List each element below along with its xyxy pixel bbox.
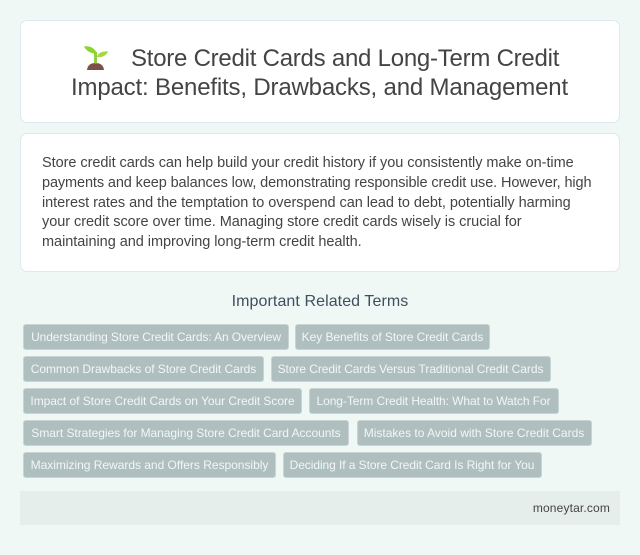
- summary paragraph: interest rates and the temptation to overspend can lead to debt, potentially harming: [42, 195, 571, 211]
- tag: [23, 356, 264, 382]
- tag: Maximizing Rewards and Offers Responsibly: [31, 458, 268, 472]
- summary paragraph: maintaining and improving long-term credit health.: [42, 234, 362, 250]
- tag: [23, 452, 276, 478]
- tag: Long-Term Credit Health: What to Watch For: [316, 394, 551, 408]
- tag: [282, 452, 542, 478]
- heading: related terms: Important Related Terms: [232, 293, 408, 310]
- tag: [356, 420, 592, 446]
- panel: summary text: [20, 133, 620, 272]
- summary paragraph: payments and keep balances low, demonstrating responsible credit use. However, high: [42, 175, 591, 191]
- title: [71, 45, 568, 101]
- panel: related term tags: [23, 324, 592, 478]
- footer source text: moneytar.com: [533, 501, 610, 515]
- tag: Key Benefits of Store Credit Cards: [302, 330, 483, 344]
- panel: title card: [20, 20, 620, 123]
- tag: [23, 420, 349, 446]
- footer bar: [20, 491, 620, 525]
- tag: [23, 388, 302, 414]
- tag: Understanding Store Credit Cards: An Overview: [31, 330, 281, 344]
- icon: seedling: [84, 46, 108, 70]
- tag: Mistakes to Avoid with Store Credit Cards: [364, 426, 584, 440]
- tag: Impact of Store Credit Cards on Your Credit Score: [30, 394, 295, 408]
- tag: Store Credit Cards Versus Traditional Credit Cards: [278, 362, 543, 376]
- tag: [23, 324, 289, 350]
- tag: [308, 388, 558, 414]
- summary paragraph: your credit score over time. Managing store credit cards wisely is crucial for: [42, 214, 522, 230]
- title: Impact: Benefits, Drawbacks, and Management: [71, 74, 568, 101]
- tag: Smart Strategies for Managing Store Credit Card Accounts: [31, 426, 341, 440]
- tag: Common Drawbacks of Store Credit Cards: [31, 362, 256, 376]
- tag: Deciding If a Store Credit Card Is Right for You: [290, 458, 534, 472]
- title: Store Credit Cards and Long-Term Credit: [131, 45, 559, 72]
- tag: [295, 324, 490, 350]
- summary paragraph: [42, 155, 591, 250]
- summary paragraph: Store credit cards can help build your credit history if you consistently make on-time: [42, 155, 574, 171]
- tag: [270, 356, 550, 382]
